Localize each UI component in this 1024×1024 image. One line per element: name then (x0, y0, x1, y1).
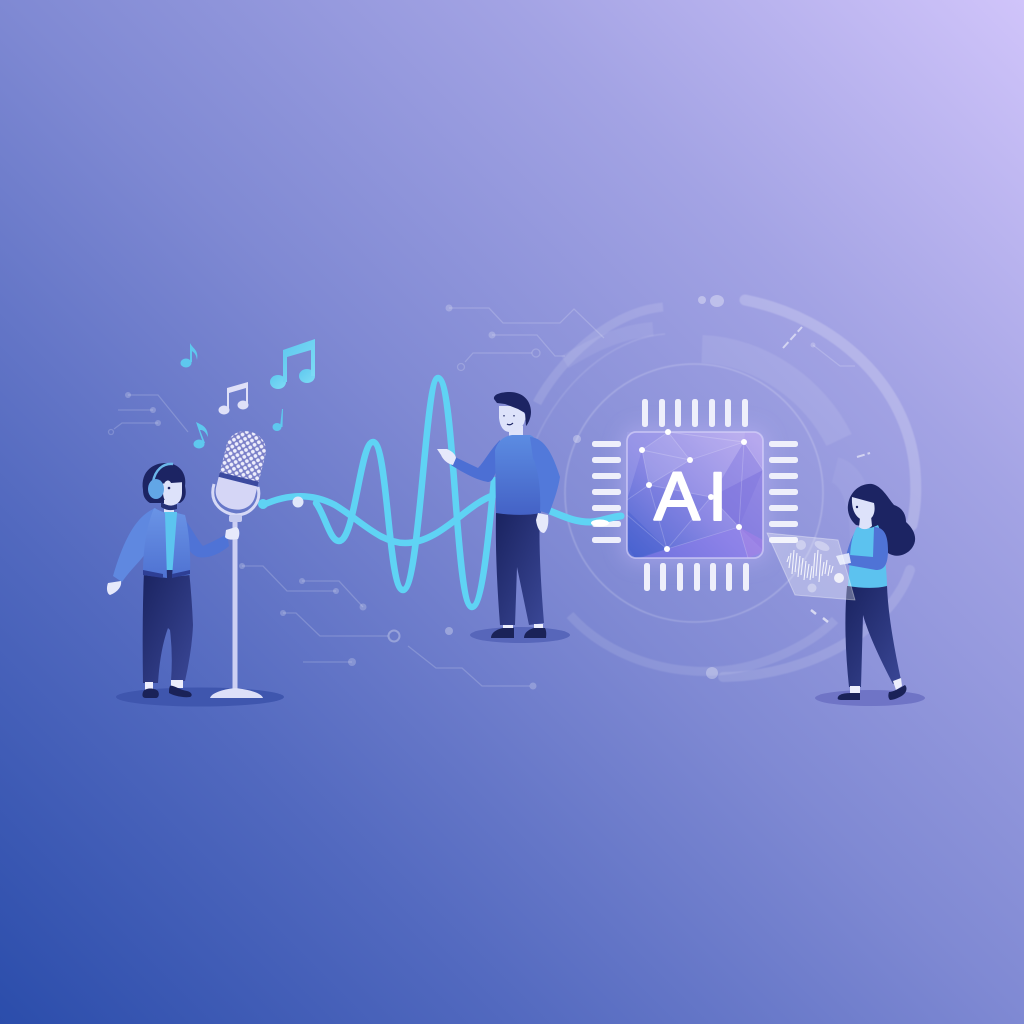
chip body (627, 432, 763, 558)
chip label AI: AI (654, 458, 735, 535)
dashes upper right (783, 327, 870, 457)
long hair (848, 484, 915, 556)
top left inner arc (565, 329, 653, 362)
ear (521, 414, 527, 420)
ground shadow: woman (815, 690, 925, 706)
wave start cap (258, 499, 268, 509)
chip network lines (627, 432, 763, 558)
chip facets (627, 432, 763, 558)
cable glow (591, 520, 609, 526)
socks (503, 624, 543, 630)
right hand (225, 527, 239, 540)
trace group center low (239, 563, 536, 690)
mic head (212, 427, 270, 514)
tablet pane (767, 533, 855, 600)
pointing arm (451, 440, 500, 482)
far shoulder (846, 530, 858, 558)
jacket left sleeve (113, 508, 156, 582)
neck (509, 426, 523, 439)
ring dots (445, 435, 718, 679)
collar (219, 472, 259, 487)
shirt (848, 525, 887, 588)
chip border (627, 432, 763, 558)
grille (220, 427, 270, 483)
eyes and smile (504, 415, 514, 425)
mic stand pole (232, 515, 238, 690)
shoes (491, 628, 546, 638)
shoes (142, 686, 192, 698)
fast wave (316, 378, 494, 607)
socks (850, 678, 902, 694)
top dots (698, 295, 724, 307)
left hand (107, 581, 121, 595)
mic holder (213, 484, 259, 515)
neck (164, 500, 174, 513)
tablet dots (834, 573, 844, 583)
trace group left top (108, 392, 188, 434)
headphone ear cup (148, 479, 164, 499)
ground shadow: singer (116, 688, 284, 706)
jacket body (143, 508, 190, 578)
shirt (164, 512, 181, 570)
far sleeve (530, 437, 560, 514)
face (852, 497, 875, 520)
character: woman with tablet (767, 484, 915, 700)
character: man (437, 392, 560, 638)
wave node (292, 496, 304, 508)
body (212, 477, 257, 514)
note 3 (270, 339, 315, 389)
top left thin arc (536, 334, 665, 440)
hand (836, 553, 851, 565)
note 2 (218, 382, 248, 414)
wide band arc (702, 349, 839, 440)
scarf collar (161, 502, 177, 510)
tablet waveform (787, 550, 833, 582)
hair (494, 392, 531, 426)
note 1 (180, 343, 197, 368)
torso (495, 435, 541, 515)
bottom arc (570, 615, 835, 671)
chip pins (592, 399, 798, 591)
hand (536, 513, 548, 533)
music notes (180, 339, 315, 448)
outer right arc (745, 300, 916, 525)
dashes under tablet (811, 610, 828, 622)
mic stand base (210, 688, 263, 698)
pants (496, 513, 544, 625)
character: singer (107, 463, 239, 698)
inner ring (565, 364, 823, 622)
face (499, 406, 525, 432)
icon: AI chip (592, 399, 798, 591)
wide band arc continued (835, 470, 863, 560)
arm (848, 527, 888, 570)
tablet faint dots (796, 539, 831, 592)
concentric tech rings around chip (536, 300, 916, 677)
pants (143, 570, 193, 683)
socks (145, 680, 183, 690)
jacket right sleeve (178, 513, 229, 557)
top left arc (537, 307, 663, 403)
trace group center top (446, 304, 855, 370)
microphone on stand (210, 427, 270, 698)
chip glow (620, 425, 770, 565)
fringe (158, 468, 185, 484)
note 5 (194, 422, 208, 448)
mic clamp (229, 515, 242, 522)
hair back (143, 463, 186, 503)
circuit traces (108, 304, 855, 690)
neck (859, 516, 872, 529)
eye (168, 487, 170, 489)
pointing hand (437, 449, 456, 465)
sound wave (258, 378, 621, 607)
pants (845, 585, 901, 687)
lower right arc (723, 570, 910, 677)
ground shadow: man (470, 627, 570, 643)
slow wave (263, 495, 494, 543)
holographic tablet (767, 533, 855, 600)
note 4 (272, 409, 283, 431)
shoes (838, 685, 906, 700)
cable to chip (550, 511, 621, 522)
jacket hem (143, 570, 190, 578)
floating dots and dashes (445, 295, 870, 679)
face (163, 480, 182, 505)
headphone band (153, 464, 173, 482)
eye (856, 506, 858, 508)
chip nodes (639, 429, 747, 552)
